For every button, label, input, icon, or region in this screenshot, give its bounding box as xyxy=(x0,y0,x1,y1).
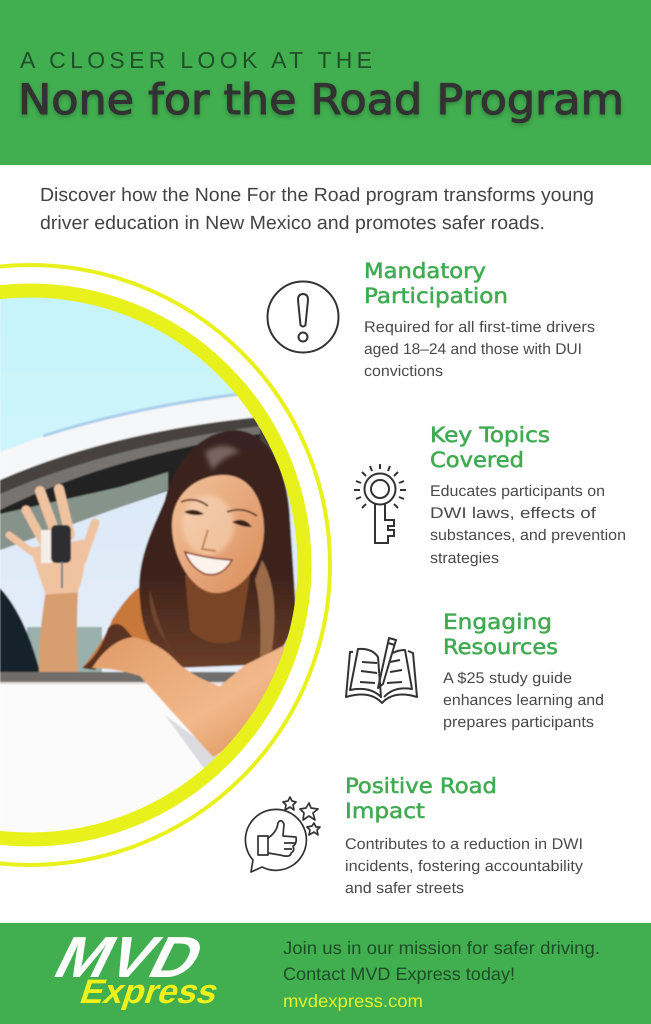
intro text xyxy=(40,185,594,234)
item: engaging resources: prepares participants xyxy=(443,714,594,731)
icon: key with rays xyxy=(354,464,406,543)
icon: thumbs up speech bubble with stars xyxy=(245,797,320,872)
footer banner: Contact MVD Express today! xyxy=(283,964,515,984)
photo: woman in car holding keys xyxy=(0,298,298,768)
horizon xyxy=(27,627,102,672)
car roof xyxy=(0,396,254,480)
footer banner xyxy=(0,923,651,1024)
neck xyxy=(185,575,250,643)
key fob xyxy=(41,530,52,563)
item: mandatory participation: Participation xyxy=(364,284,508,308)
face xyxy=(172,475,264,593)
shoulder in shadow xyxy=(82,586,152,668)
body text: Educates participants on xyxy=(430,483,605,500)
leaning arm xyxy=(92,637,290,757)
item: engaging resources: enhances learning and xyxy=(443,692,604,709)
intro text: Discover how the None For the Road program transforms young xyxy=(40,185,594,206)
hand with fingers xyxy=(9,489,95,594)
heading: Engaging xyxy=(443,610,552,634)
item: positive road impact: incidents, fostering accountability xyxy=(345,858,583,875)
item: key topics covered: Covered xyxy=(430,448,524,472)
hair xyxy=(139,430,296,668)
logo: MVD Express: Express xyxy=(75,973,224,1011)
item: key topics covered: strategies xyxy=(430,550,499,567)
item: mandatory participation xyxy=(268,259,595,380)
logo: MVD Express xyxy=(44,925,224,1011)
yellow ring: thin xyxy=(0,265,330,865)
window glass xyxy=(0,470,310,680)
item: key topics covered xyxy=(354,423,626,567)
item: positive road impact: Impact xyxy=(345,799,425,823)
main title: None for the Road Program xyxy=(18,75,624,124)
item: engaging resources xyxy=(346,610,604,731)
brows and eyes xyxy=(181,500,208,506)
smile xyxy=(185,552,232,575)
body text: Contributes to a reduction in DWI xyxy=(345,836,583,853)
window sill trim xyxy=(0,670,237,683)
item: engaging resources: Resources xyxy=(443,635,558,659)
call to action: Join us in our mission for safer driving. xyxy=(283,938,600,958)
heading: Mandatory xyxy=(364,259,486,283)
heading: Positive Road xyxy=(345,774,497,798)
intro text: driver education in New Mexico and promotes safer roads. xyxy=(40,213,545,234)
item: mandatory participation: convictions xyxy=(364,363,443,380)
item: key topics covered: DWI laws, effects of xyxy=(430,505,597,522)
yellow ring: thick xyxy=(0,290,304,840)
item: mandatory participation: aged 18–24 and those with DUI xyxy=(364,341,582,358)
logo: MVD Express: MVD xyxy=(44,925,215,990)
item: positive road impact: and safer streets xyxy=(345,880,464,897)
car seat xyxy=(0,588,40,672)
website: mvdexpress.com xyxy=(283,991,423,1011)
header banner xyxy=(0,0,651,165)
body text: A $25 study guide xyxy=(443,670,572,687)
car door xyxy=(0,684,222,832)
body text: Required for all first-time drivers xyxy=(364,319,595,336)
heading: Key Topics xyxy=(430,423,550,447)
item: positive road impact xyxy=(245,774,583,897)
raised arm xyxy=(39,588,78,672)
icon: exclamation in circle xyxy=(268,282,338,352)
item: key topics covered: substances, and prevention xyxy=(430,527,626,544)
icon: open book with pen xyxy=(346,638,417,703)
eyebrow heading: A CLOSER LOOK AT THE xyxy=(20,47,372,73)
